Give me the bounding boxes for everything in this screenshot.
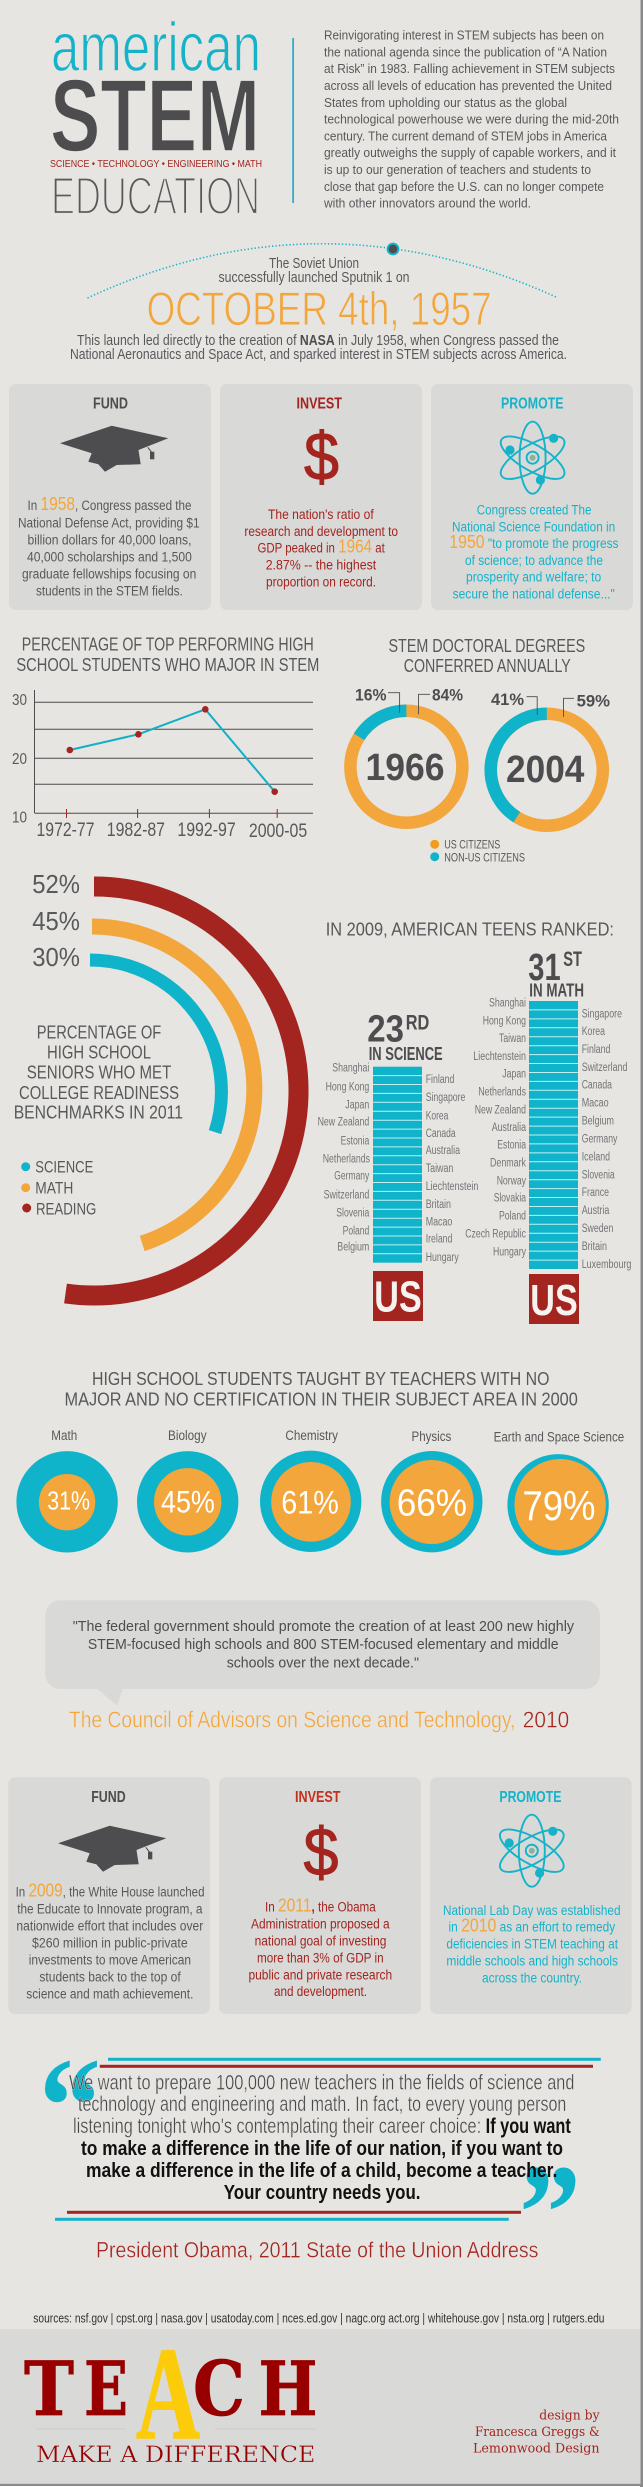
ranking: math: Hong Kong bbox=[483, 1015, 526, 1027]
callout: council quote: schools over the next decade." bbox=[227, 1655, 419, 1671]
panel: invest 2011 bbox=[219, 1777, 421, 2014]
legend: subjects bbox=[21, 1157, 96, 1219]
intro paragraph: with other innovators around the world. bbox=[323, 196, 531, 211]
heading: college readiness: SENIORS WHO MET bbox=[27, 1062, 171, 1083]
ranking: math: ST bbox=[563, 948, 582, 971]
ranking: math: Switzerland bbox=[582, 1062, 627, 1074]
intro paragraph: the national agenda since the publication of “A Nation bbox=[324, 44, 607, 60]
ranking: science: Hungary bbox=[426, 1252, 459, 1264]
ranking: science: Estonia bbox=[341, 1135, 370, 1147]
ranking: science: Belgium bbox=[337, 1242, 369, 1254]
ranking: science: Japan bbox=[345, 1100, 369, 1112]
heading: top performing students: SCHOOL STUDENTS WHO MAJOR IN STEM bbox=[16, 654, 319, 675]
ranking: math: Liechtenstein bbox=[473, 1051, 526, 1063]
ranking: science bbox=[318, 1009, 478, 1322]
heading: college readiness: PERCENTAGE OF bbox=[37, 1022, 161, 1043]
ranking: science: Finland bbox=[426, 1074, 454, 1086]
invest text: 2.87% -- the highest bbox=[266, 558, 376, 573]
intro paragraph: greatly outweighs the supply of capable workers, and it bbox=[324, 145, 616, 160]
ranking: math: US bbox=[530, 1276, 578, 1325]
ranking: math: Taiwan bbox=[499, 1033, 526, 1045]
title: american STEM education: american bbox=[51, 8, 261, 86]
ranking: science: New Zealand bbox=[318, 1117, 369, 1129]
title: american STEM education: STEM bbox=[50, 58, 260, 173]
circle: physics 66%: 66% bbox=[397, 1483, 467, 1525]
donut chart: 2004: 2004 bbox=[506, 749, 584, 791]
invest text: research and development to bbox=[244, 524, 398, 539]
panel: fund 1958 bbox=[9, 384, 211, 610]
intro paragraph: technological powerhouse we were during the mid-20th bbox=[324, 112, 619, 127]
promote text: National Lab Day was established bbox=[443, 1903, 620, 1918]
panel: invest 1964 bbox=[220, 384, 422, 610]
donut chart: 1966 bbox=[350, 687, 463, 823]
ranking: math: Australia bbox=[492, 1122, 526, 1134]
sputnik launch text: The Soviet Union bbox=[269, 256, 359, 272]
ranking: science: Canada bbox=[426, 1128, 456, 1140]
credit: design by: design by bbox=[539, 2408, 600, 2423]
logo: teach make a difference: MAKE A DIFFERENCE bbox=[36, 2443, 315, 2468]
circle: math 31%: 31% bbox=[47, 1485, 90, 1515]
ranking: math: Sweden bbox=[582, 1223, 613, 1235]
invest text: public and private research bbox=[248, 1967, 392, 1982]
invest text: The nation's ratio of bbox=[268, 507, 374, 522]
callout: council quote: STEM-focused high schools and 800 STEM-focused elementary and middle bbox=[88, 1637, 559, 1653]
legend: subjects: READING bbox=[36, 1200, 96, 1219]
ranking: math: IN MATH bbox=[529, 981, 584, 1001]
title: american STEM education: EDUCATION bbox=[51, 167, 260, 226]
circle: earth and space science 79% bbox=[494, 1430, 624, 1556]
panel: fund 2009 bbox=[8, 1777, 210, 2014]
icon: atom bbox=[495, 422, 570, 494]
heading: doctoral degrees bbox=[388, 635, 585, 676]
fund text: billion dollars for 40,000 loans, bbox=[28, 532, 192, 547]
ranking: math: Shanghai bbox=[489, 998, 526, 1010]
sputnik launch text: This launch led directly to the creation of NASA in July 1958, when Congress passed the bbox=[77, 333, 559, 349]
heading: top performing students: PERCENTAGE OF TOP PERFORMING HIGH bbox=[22, 634, 314, 655]
logo: teach make a difference: T bbox=[24, 2345, 74, 2433]
intro paragraph: is up to our generation of teachers and students to bbox=[324, 162, 591, 177]
circle: biology 45%: Biology bbox=[168, 1428, 207, 1443]
invest text: and development. bbox=[274, 1984, 367, 1999]
ranking: math: Britain bbox=[582, 1241, 607, 1253]
ranking: math: Iceland bbox=[582, 1151, 610, 1163]
ranking: math bbox=[465, 947, 631, 1325]
heading: promote: PROMOTE bbox=[501, 395, 564, 412]
promote text: across the country. bbox=[482, 1970, 582, 1985]
invest text: GDP peaked in 1964 at bbox=[258, 537, 385, 557]
fund text bbox=[18, 494, 200, 598]
ranking: science: Singapore bbox=[426, 1092, 465, 1104]
invest text: more than 3% of GDP in bbox=[257, 1950, 384, 1965]
circle: physics 66% bbox=[381, 1429, 482, 1552]
ranking: math: Netherlands bbox=[478, 1086, 526, 1098]
ranking: math: Macao bbox=[582, 1098, 609, 1110]
heading: top performing students bbox=[16, 634, 319, 675]
fund text: students back to the top of bbox=[39, 1970, 181, 1985]
donut chart: 1966: 1966 bbox=[366, 747, 444, 789]
ranking: science: Macao bbox=[426, 1216, 452, 1228]
sputnik orbit arc bbox=[88, 241, 556, 298]
radial chart values: 52% bbox=[32, 871, 80, 899]
ranking: science: Liechtenstein bbox=[426, 1181, 478, 1193]
intro paragraph: at Risk” in 1983. Falling achievement in STEM subjects bbox=[324, 61, 615, 76]
ranking: math: Estonia bbox=[497, 1140, 526, 1152]
heading: teachers without certification bbox=[64, 1368, 578, 1410]
ranking: math: Korea bbox=[582, 1026, 605, 1038]
ranking: math: Austria bbox=[582, 1205, 610, 1217]
ranking: math: Belgium bbox=[582, 1116, 614, 1128]
heading: fund: FUND bbox=[93, 395, 128, 412]
fund text: the Educate to Innovate program, a bbox=[17, 1902, 203, 1917]
intro paragraph: close that gap before the U.S. can no longer compete bbox=[324, 179, 604, 194]
ranking: science: Poland bbox=[343, 1226, 369, 1238]
promote text: deficiencies in STEM teaching at bbox=[446, 1936, 618, 1951]
promote text bbox=[443, 1903, 620, 1985]
fund text: science and math achievement. bbox=[26, 1987, 193, 2002]
circle: earth and space science 79%: Earth and Space Science bbox=[494, 1430, 624, 1445]
radial chart values bbox=[32, 871, 80, 972]
ranking: math: Czech Republic bbox=[465, 1228, 526, 1240]
invest text: In 2011, the Obama bbox=[265, 1896, 376, 1916]
circle: earth and space science 79%: 79% bbox=[522, 1482, 596, 1529]
promote text bbox=[449, 502, 619, 601]
intro paragraph: Reinvigorating interest in STEM subjects has been on bbox=[324, 28, 604, 42]
intro paragraph: century. The current demand of STEM jobs in America bbox=[324, 128, 608, 143]
heading: promote: PROMOTE bbox=[499, 1789, 561, 1806]
fund text: In 1958, Congress passed the bbox=[28, 494, 192, 514]
attribution: council of advisors: The Council of Advisors on Science and Technology, bbox=[69, 1707, 515, 1733]
ranking: science: Australia bbox=[426, 1145, 460, 1157]
heading: doctoral degrees: STEM DOCTORAL DEGREES bbox=[388, 635, 585, 656]
intro paragraph: across all levels of education has prevented the United bbox=[324, 78, 612, 93]
donut chart: 1966: 16% bbox=[355, 687, 387, 705]
fund text: 40,000 scholarships and 1,500 bbox=[27, 549, 192, 564]
credit: design by bbox=[473, 2408, 600, 2457]
panel: promote 2010 bbox=[430, 1777, 632, 2014]
fund text: graduate fellowships focusing on bbox=[22, 566, 196, 581]
radial chart values: 30% bbox=[32, 944, 80, 972]
fund text: In 2009, the White House launched bbox=[16, 1881, 204, 1901]
circle: physics 66%: Physics bbox=[412, 1429, 452, 1444]
logo: teach make a difference: E bbox=[84, 2345, 128, 2433]
logo: teach make a difference: H bbox=[258, 2345, 318, 2433]
quote rules: bottom bbox=[55, 2211, 521, 2221]
ranking: math: Finland bbox=[582, 1044, 610, 1056]
legend: citizens bbox=[430, 837, 525, 865]
line chart: 20 bbox=[12, 751, 27, 768]
ranking: math: Japan bbox=[502, 1069, 526, 1081]
logo: teach make a difference bbox=[24, 2320, 318, 2468]
attribution: council of advisors: 2010 bbox=[523, 1707, 569, 1733]
sputnik launch text: successfully launched Sputnik 1 on bbox=[218, 270, 410, 286]
icon: opening quote mark: “ bbox=[39, 2029, 101, 2182]
icon: closing quote mark: ” bbox=[519, 2136, 581, 2289]
line chart bbox=[12, 690, 313, 842]
legend: subjects: SCIENCE bbox=[35, 1157, 93, 1176]
fund text: National Defense Act, providing $1 bbox=[18, 515, 200, 530]
line chart: 1972-77 bbox=[36, 820, 94, 841]
circle: biology 45% bbox=[137, 1428, 238, 1553]
ranking: science: Slovenia bbox=[336, 1208, 370, 1220]
intro paragraph: States from upholding our status as the global bbox=[324, 95, 567, 110]
donut chart: 2004: 59% bbox=[577, 693, 610, 711]
icon: atom bbox=[494, 1815, 569, 1887]
icon: dollar sign: $ bbox=[304, 419, 339, 495]
donut chart: 1966: 84% bbox=[432, 687, 463, 705]
ranking: science: Shanghai bbox=[332, 1063, 369, 1075]
credit: design by: Lemonwood Design bbox=[473, 2442, 600, 2457]
obama quote text: make a difference in the life of a child, become a teacher. bbox=[86, 2159, 557, 2182]
legend: subjects: MATH bbox=[35, 1178, 73, 1197]
ranking: science: Switzerland bbox=[324, 1189, 369, 1201]
donut chart: 2004 bbox=[491, 691, 610, 826]
title: american STEM education bbox=[50, 8, 262, 226]
ranking: science: Hong Kong bbox=[326, 1082, 369, 1094]
circle: chemistry 61%: Chemistry bbox=[285, 1428, 338, 1443]
invest text: Administration proposed a bbox=[251, 1917, 390, 1932]
credit: design by: Francesca Greggs & bbox=[475, 2425, 600, 2440]
ranking: science: Netherlands bbox=[323, 1154, 370, 1166]
heading: college readiness bbox=[14, 1022, 183, 1123]
heading: invest: INVEST bbox=[295, 1789, 341, 1806]
callout: council quote bbox=[45, 1600, 600, 1706]
ranking: math: Slovenia bbox=[582, 1169, 615, 1181]
icon: graduation cap bbox=[58, 1826, 166, 1872]
heading: college readiness: BENCHMARKS IN 2011 bbox=[14, 1102, 183, 1123]
ranking: math: New Zealand bbox=[475, 1104, 526, 1116]
ranking: math: Poland bbox=[499, 1211, 526, 1223]
ranking: science: US bbox=[374, 1273, 422, 1322]
fund text: investments to move American bbox=[29, 1953, 191, 1968]
fund text bbox=[16, 1881, 204, 2002]
callout: council quote: "The federal government should promote the creation of at least 200 new highly bbox=[73, 1619, 575, 1635]
invest text: national goal of investing bbox=[255, 1934, 386, 1949]
title: american STEM education: SCIENCE • TECHNOLOGY • ENGINEERING • MATH bbox=[50, 158, 262, 170]
ranking: science: 23 bbox=[367, 1009, 404, 1051]
circle: chemistry 61%: 61% bbox=[281, 1484, 339, 1520]
heading: teachers without certification: MAJOR AND NO CERTIFICATION IN THEIR SUBJECT AREA IN 2000 bbox=[64, 1389, 578, 1410]
promote text: 1950 "to promote the progress bbox=[449, 532, 619, 552]
invest text bbox=[244, 507, 398, 590]
promote text: prosperity and welfare; to bbox=[466, 570, 601, 585]
promote text: in 2010 as an effort to remedy bbox=[448, 1916, 615, 1936]
ranking: math: France bbox=[582, 1187, 609, 1199]
promote text: National Science Foundation in bbox=[452, 519, 615, 534]
promote text: of science; to advance the bbox=[465, 553, 603, 568]
line chart: 10 bbox=[12, 809, 27, 826]
line chart: 2000-05 bbox=[249, 821, 307, 842]
legend: citizens: NON-US CITIZENS bbox=[444, 851, 525, 865]
promote text: Congress created The bbox=[477, 502, 591, 517]
circle: math 31% bbox=[16, 1428, 118, 1553]
line chart: 30 bbox=[12, 692, 27, 709]
heading: doctoral degrees: CONFERRED ANNUALLY bbox=[404, 655, 571, 676]
line chart: 1992-97 bbox=[177, 820, 236, 841]
line chart: 1982-87 bbox=[107, 820, 165, 841]
ranking: science: Taiwan bbox=[426, 1163, 453, 1175]
heading: teachers without certification: HIGH SCHOOL STUDENTS TAUGHT BY TEACHERS WITH NO bbox=[92, 1368, 550, 1389]
sputnik launch text: OCTOBER 4th, 1957 bbox=[147, 283, 492, 336]
fund text: students in the STEM fields. bbox=[36, 583, 183, 598]
icon: dollar sign: $ bbox=[304, 1814, 338, 1890]
intro paragraph bbox=[323, 28, 619, 211]
icon: graduation cap bbox=[60, 426, 168, 472]
ranking: math: 31 bbox=[528, 947, 561, 989]
heading: college readiness: HIGH SCHOOL bbox=[47, 1042, 151, 1063]
ranking: math: Slovakia bbox=[494, 1193, 526, 1205]
ranking: math: Canada bbox=[582, 1080, 612, 1092]
ranking: math: Luxembourg bbox=[582, 1259, 631, 1271]
obama quote text: listening tonight who's contemplating their career choice: If you want bbox=[73, 2115, 571, 2138]
heading: fund: FUND bbox=[91, 1789, 126, 1806]
ranking: math: Norway bbox=[497, 1175, 526, 1187]
radial chart values: 45% bbox=[32, 908, 80, 936]
sputnik launch text bbox=[70, 256, 567, 363]
ranking: math: Hungary bbox=[493, 1246, 526, 1258]
invest text bbox=[248, 1896, 392, 1999]
logo: teach make a difference: C bbox=[193, 2345, 245, 2433]
promote text: secure the national defense..." bbox=[453, 586, 615, 601]
quote rules: top bbox=[100, 2058, 601, 2068]
ranking: science: Germany bbox=[334, 1170, 369, 1182]
invest text: proportion on record. bbox=[266, 575, 376, 590]
attribution: president obama: President Obama, 2011 State of the Union Address bbox=[96, 2237, 538, 2262]
fund text: $260 million in public-private bbox=[32, 1936, 188, 1951]
ranking: math: Germany bbox=[582, 1133, 618, 1145]
ranking: math: Denmark bbox=[490, 1157, 526, 1169]
ranking: science: Korea bbox=[426, 1110, 449, 1122]
ranking: science: IN SCIENCE bbox=[369, 1044, 443, 1064]
circle: math 31%: Math bbox=[51, 1428, 77, 1443]
radial bar chart: college readiness bbox=[66, 886, 299, 1295]
ranking: science: Britain bbox=[426, 1199, 451, 1211]
fund text: nationwide effort that includes over bbox=[16, 1919, 204, 1934]
promote text: middle schools and high schools bbox=[446, 1954, 618, 1969]
legend: citizens: US CITIZENS bbox=[444, 837, 500, 851]
obama quote text: Your country needs you. bbox=[224, 2181, 420, 2204]
donut chart: 2004: 41% bbox=[491, 691, 524, 709]
footer band bbox=[0, 2320, 640, 2484]
panel: promote 1950 bbox=[431, 384, 633, 610]
obama quote text bbox=[69, 2071, 574, 2204]
obama quote text: to make a difference in the life of our nation, if you want to bbox=[81, 2137, 563, 2160]
heading: teen rankings: IN 2009, AMERICAN TEENS RANKED: bbox=[326, 919, 614, 940]
ranking: science: Ireland bbox=[426, 1233, 452, 1245]
circle: chemistry 61% bbox=[260, 1428, 361, 1552]
ranking: science: RD bbox=[406, 1011, 429, 1034]
circle: biology 45%: 45% bbox=[161, 1484, 215, 1520]
logo: teach make a difference: A bbox=[136, 2320, 200, 2467]
heading: invest: INVEST bbox=[296, 395, 342, 412]
ranking: math: Singapore bbox=[582, 1008, 622, 1020]
heading: college readiness: COLLEGE READINESS bbox=[19, 1082, 179, 1103]
